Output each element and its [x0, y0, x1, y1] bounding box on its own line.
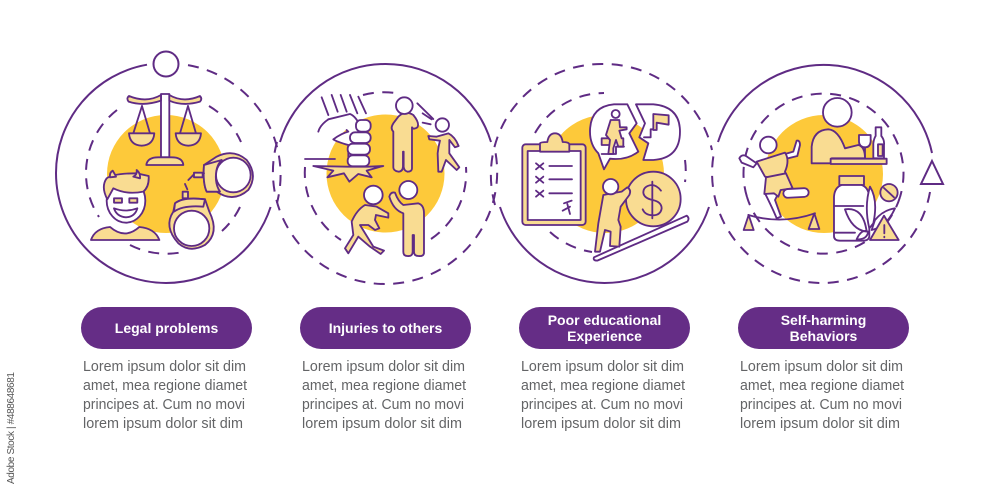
icon: two people fighting — [345, 181, 424, 256]
pill: poor educational experience: Poor educational — [548, 312, 661, 328]
text: body 3: Lorem ipsum dolor sit dim — [521, 359, 684, 375]
panel: self-harming behaviors — [712, 65, 943, 432]
text: body 2: lorem ipsum dolor sit dim — [302, 416, 462, 432]
text: body 4: lorem ipsum dolor sit dim — [740, 416, 900, 432]
text: body 3: amet, mea regione diamet — [521, 378, 685, 394]
icon: person hit and running child — [392, 97, 459, 172]
ring 4 — [712, 65, 932, 283]
text: body 4 — [740, 359, 904, 432]
pill: self-harming behaviors: Self-harming — [781, 312, 866, 328]
pill: legal problems: Legal problems — [115, 320, 218, 336]
panel: legal problems — [56, 52, 281, 432]
vertical stock credit: Adobe Stock | #488648681 — [6, 372, 17, 484]
text: body 2 — [302, 359, 466, 432]
icon: balancing child on tightrope — [739, 137, 819, 230]
text: body 2: Lorem ipsum dolor sit dim — [302, 359, 465, 375]
ring 1 — [56, 52, 281, 283]
icon: broken speech bubble with career steps — [590, 104, 680, 169]
icon: grinning devil — [91, 170, 159, 240]
icon: clipboard checklist — [522, 133, 586, 225]
icon: handcuffs — [169, 153, 253, 249]
text: body 4: Lorem ipsum dolor sit dim — [740, 359, 903, 375]
pill: injuries to others: Injuries to others — [329, 320, 442, 336]
text: body 3 — [521, 359, 685, 432]
icon: punching fist — [305, 95, 383, 182]
icon: person pushing coin uphill — [594, 172, 688, 261]
panel: poor educational experience — [491, 64, 712, 432]
yellow disc 3 — [546, 115, 664, 233]
icon: pills, cannabis leaf and warning — [834, 176, 899, 241]
text: body 3: lorem ipsum dolor sit dim — [521, 416, 681, 432]
panel: injuries to others — [273, 64, 497, 432]
ring 3 — [491, 64, 712, 283]
pill: poor educational experience — [519, 307, 690, 349]
text: body 4: amet, mea regione diamet — [740, 378, 904, 394]
pill: self-harming behaviors: Behaviors — [790, 328, 858, 344]
icon: scales of justice — [127, 94, 201, 165]
text: body 1: lorem ipsum dolor sit dim — [83, 416, 243, 432]
pill: legal problems — [81, 307, 252, 349]
arrow: triangle marker — [921, 161, 943, 184]
text: body 4: principes at. Cum no movi — [740, 397, 902, 413]
text: body 1 — [83, 359, 247, 432]
text: body 1: principes at. Cum no movi — [83, 397, 245, 413]
text: body 2: amet, mea regione diamet — [302, 378, 466, 394]
ring 2 — [273, 64, 497, 284]
pill: self-harming behaviors — [738, 307, 909, 349]
pill: injuries to others — [300, 307, 471, 349]
text: body 1: amet, mea regione diamet — [83, 378, 247, 394]
yellow disc 1 — [107, 115, 225, 233]
icon: drinking person — [812, 98, 887, 164]
pill: poor educational experience: Experience — [567, 328, 642, 344]
text: body 3: principes at. Cum no movi — [521, 397, 683, 413]
text: body 2: principes at. Cum no movi — [302, 397, 464, 413]
yellow disc 4 — [765, 115, 883, 233]
text: body 1: Lorem ipsum dolor sit dim — [83, 359, 246, 375]
yellow disc 2 — [326, 114, 444, 232]
